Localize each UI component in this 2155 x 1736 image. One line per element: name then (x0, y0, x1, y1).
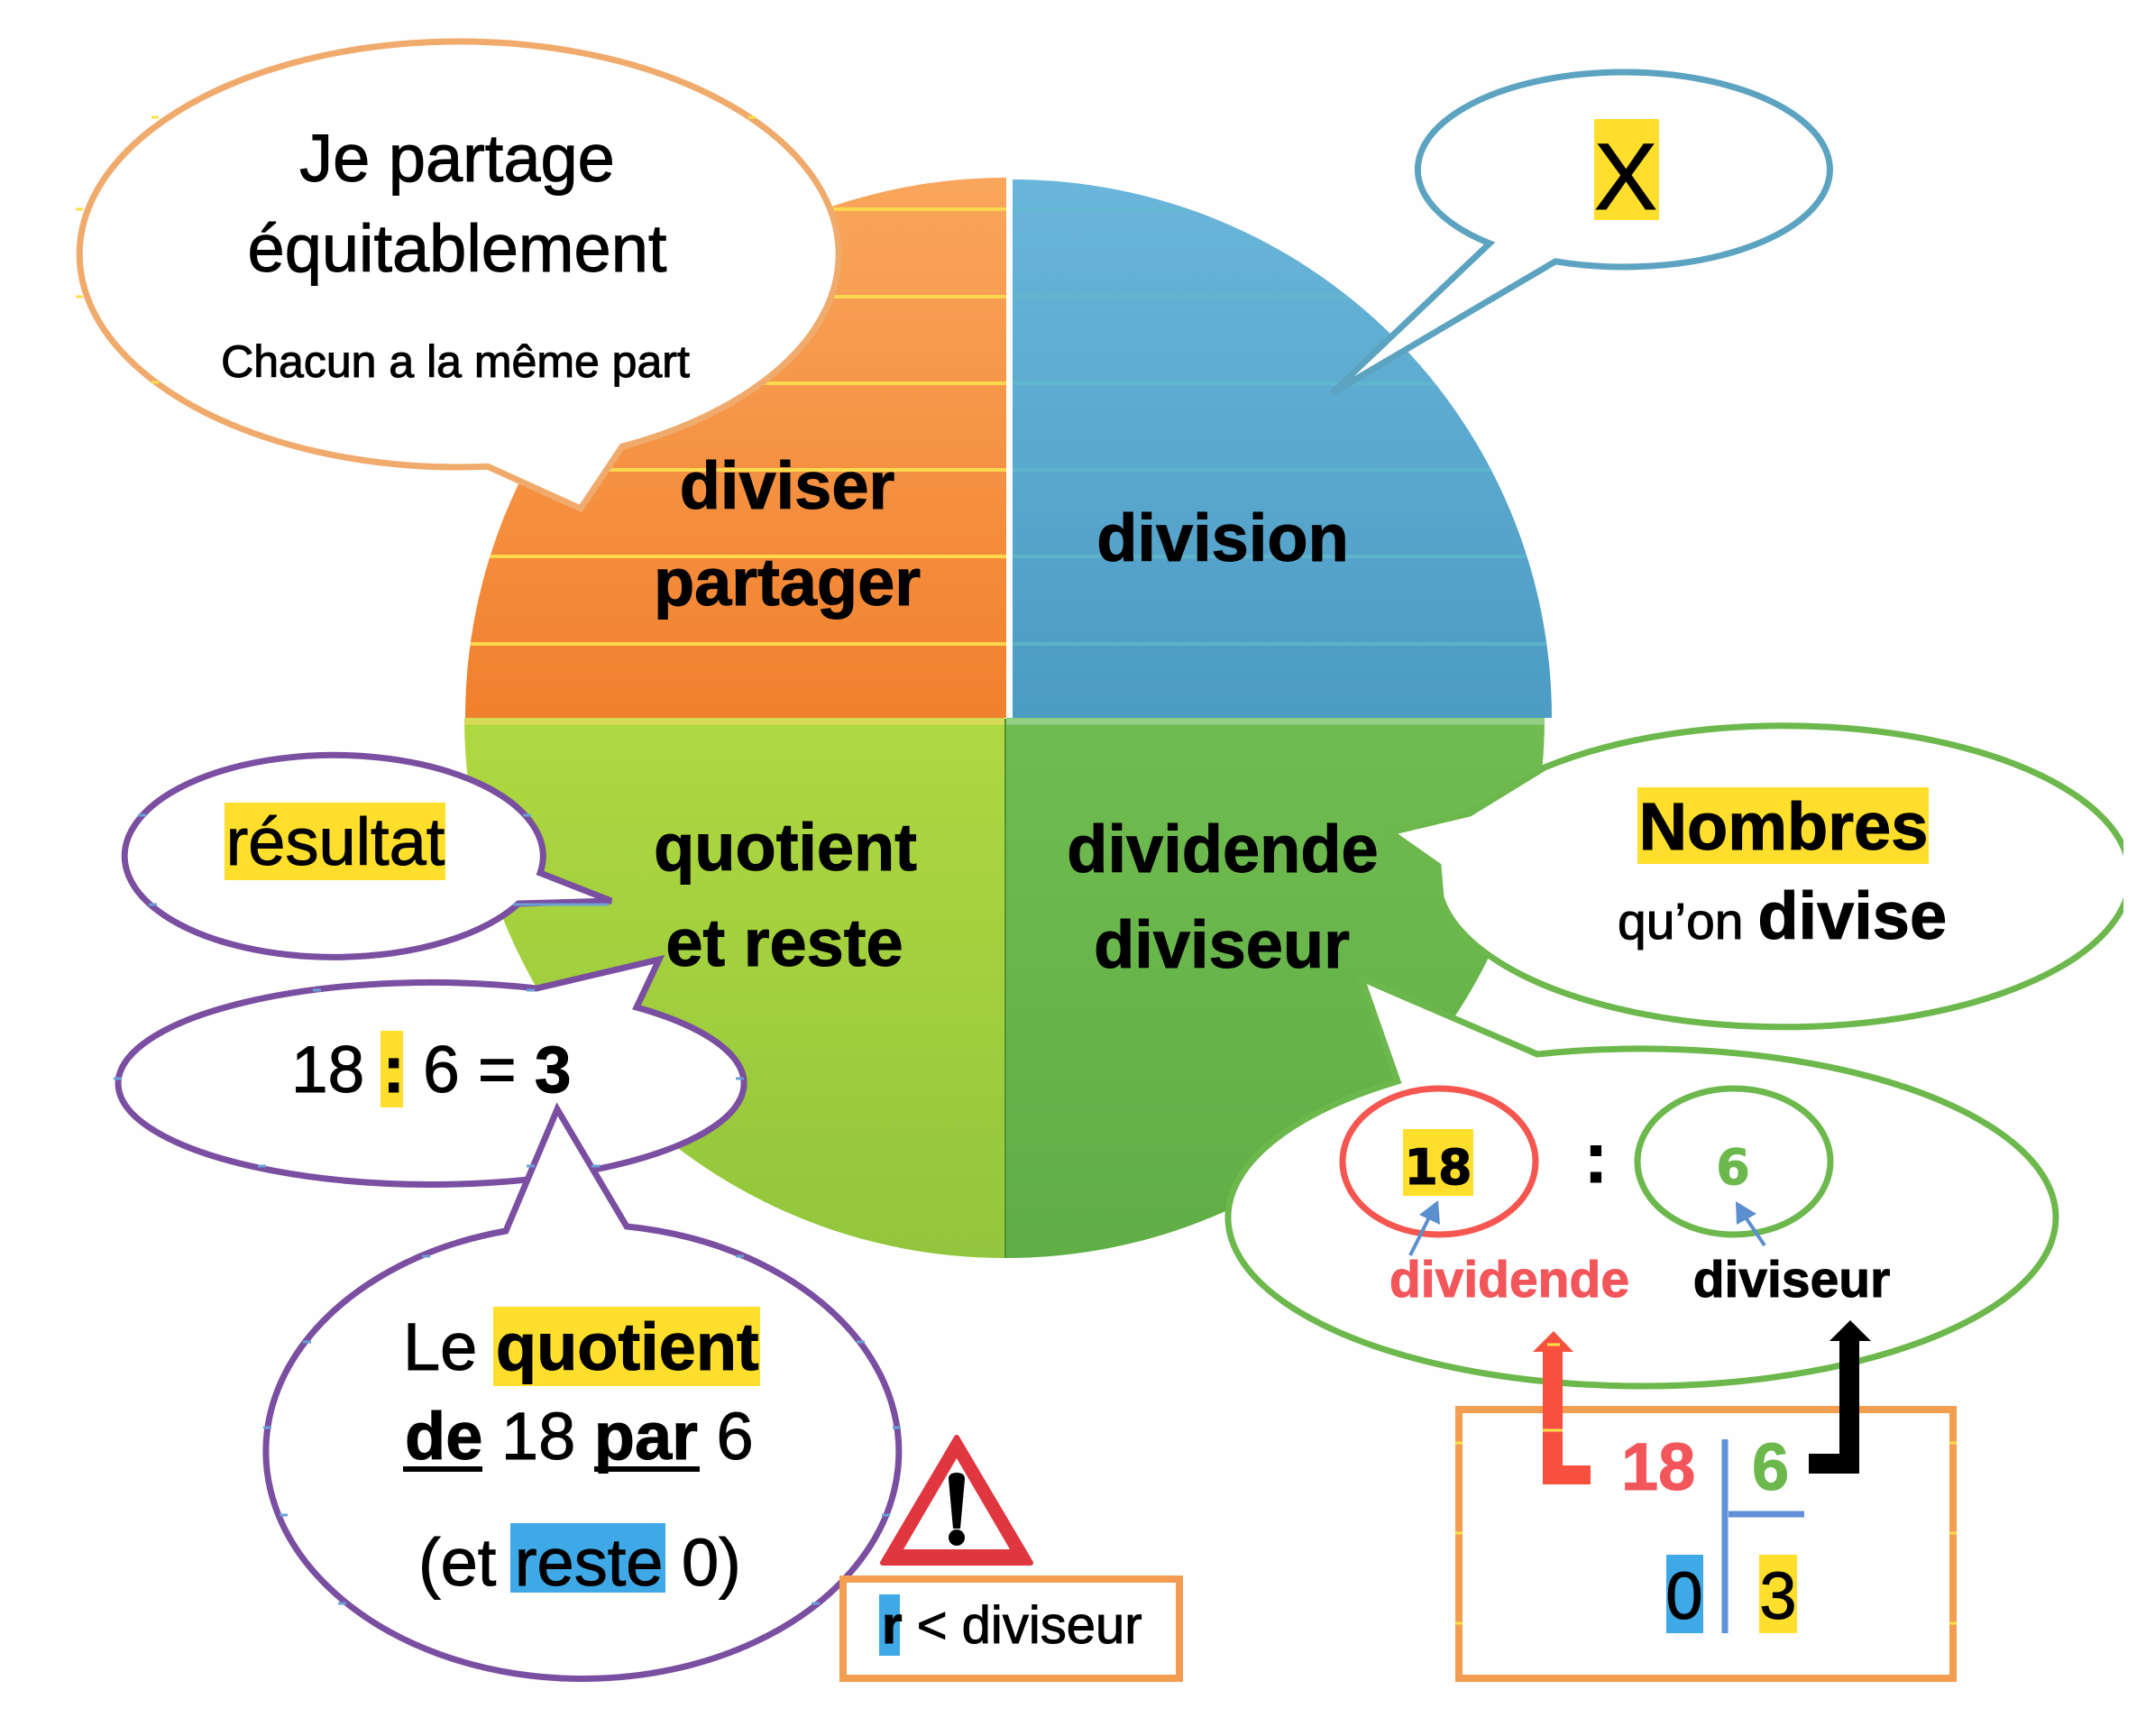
box: r < diviseur (843, 1579, 1179, 1678)
pie quadrant: dark green (1006, 718, 1545, 1258)
division sign: : (1584, 1117, 1608, 1198)
ellipse: dividende 18 (1343, 1088, 1536, 1235)
pie quadrant: blue (1013, 179, 1560, 718)
pie label: dividende diviseur: diviseur (1094, 907, 1350, 982)
ellipse: dividende 18: 18 (1404, 1139, 1472, 1196)
pie label: dividende diviseur (1067, 812, 1379, 982)
callout: je partage (79, 41, 839, 509)
pie label: diviser partager (654, 448, 921, 620)
callout: le quotient: (et reste 0) (418, 1525, 741, 1600)
callout: résultat: résultat (226, 804, 445, 879)
division bracket (1725, 1439, 1804, 1633)
callout: résultat (124, 755, 611, 957)
callout: 18 : 6 = 3: 18 : 6 = 3 (291, 1033, 571, 1107)
label: diviseur: diviseur (1693, 1251, 1890, 1309)
pie label: dividende diviseur: dividende (1067, 812, 1379, 886)
ellipse: diviseur 6 (1637, 1088, 1830, 1235)
divisor 6: 6 (1752, 1429, 1789, 1504)
arrow: black to diviseur (1809, 1320, 1871, 1474)
callout: nombres qu'on divise: qu’on divise (1618, 878, 1947, 953)
pie chart (451, 178, 1560, 1258)
arrow: to 18 (1410, 1200, 1440, 1255)
pie label: division: division (1096, 501, 1349, 575)
callout: le quotient: Le quotient (403, 1309, 759, 1384)
arrow: red to dividende (1533, 1331, 1591, 1484)
quotient 3: 3 (1759, 1558, 1797, 1633)
pie label: diviser partager: partager (654, 545, 921, 620)
callout: X (1332, 72, 1829, 393)
callout: X: X (1594, 124, 1657, 230)
callout: nombres qu'on divise (1390, 726, 2130, 1027)
callout: je partage: Je partage (299, 121, 615, 196)
label: dividende: dividende (1389, 1251, 1629, 1309)
callout: dividende et diviseur (1228, 978, 2056, 1386)
pie label: quotient et reste: quotient (654, 810, 917, 885)
callout: je partage: équitablement (248, 211, 667, 286)
pie label: diviser partager: diviser (680, 448, 894, 523)
icon: warning triangle (883, 1437, 1031, 1563)
arrow: to 6 (1736, 1201, 1765, 1245)
pie label: quotient et reste: et reste (665, 905, 903, 980)
pie label: quotient et reste (654, 810, 917, 980)
pie quadrant: light green (464, 718, 1004, 1258)
ellipse: diviseur 6: 6 (1716, 1139, 1750, 1196)
callout: le quotient: de 18 par 6 (405, 1399, 754, 1474)
dividend 18: 18 (1621, 1429, 1695, 1504)
callout: 18 : 6 = 3 (118, 960, 744, 1184)
box: r < diviseur: r < diviseur (882, 1596, 1142, 1655)
callout: nombres qu'on divise: Nombres (1639, 789, 1928, 864)
pie quadrant: orange (451, 178, 1006, 718)
box: division posée (1459, 1410, 1953, 1678)
callout: je partage: Chacun a la même part (221, 336, 690, 387)
callout: le quotient (266, 1109, 899, 1679)
remainder 0: 0 (1665, 1558, 1703, 1633)
